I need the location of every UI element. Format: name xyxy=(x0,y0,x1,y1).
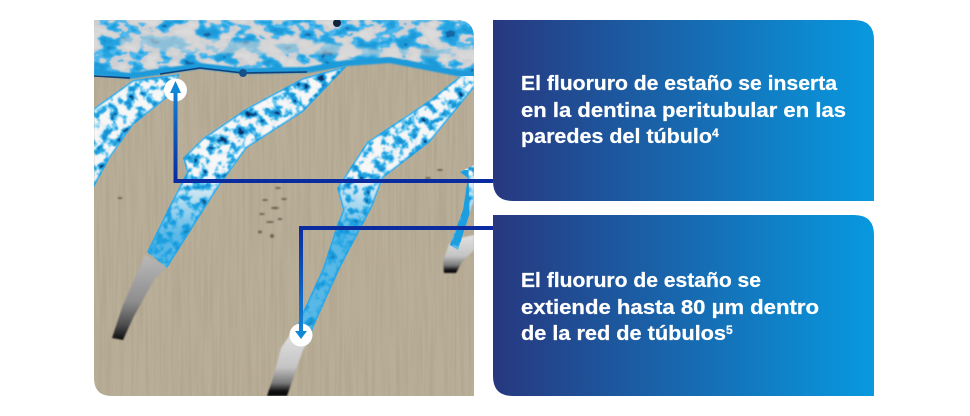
marker: lower white circle xyxy=(290,324,312,346)
callout text upper xyxy=(521,72,846,148)
connector: lower line and arrow xyxy=(290,228,493,346)
callout text lower: 5 xyxy=(726,323,733,337)
blue tubules xyxy=(94,60,474,350)
callout text upper: paredes del túbulo xyxy=(521,125,712,148)
callout text upper: El fluoruro de estaño se inserta xyxy=(521,72,838,95)
dark specks cluster xyxy=(118,169,443,238)
panel: upper callout xyxy=(493,20,874,201)
callout text lower: de la red de túbulos xyxy=(521,322,726,345)
connector: upper line and arrow xyxy=(164,78,493,181)
marker: upper white circle xyxy=(164,78,187,102)
top mineral band xyxy=(94,19,474,80)
photo: dentin tubules micrograph xyxy=(94,19,474,396)
tubule blue edges xyxy=(94,66,474,340)
panel: lower callout xyxy=(493,215,874,396)
grey tubule tips xyxy=(112,235,474,396)
callout text lower xyxy=(521,269,819,345)
callout text lower: El fluoruro de estaño se xyxy=(521,269,761,292)
callout text lower: extiende hasta 80 µm dentro xyxy=(521,296,819,319)
dentin background xyxy=(94,20,474,396)
callout text upper: 4 xyxy=(712,126,719,140)
callout text upper: en la dentina peritubular en las xyxy=(521,99,846,122)
